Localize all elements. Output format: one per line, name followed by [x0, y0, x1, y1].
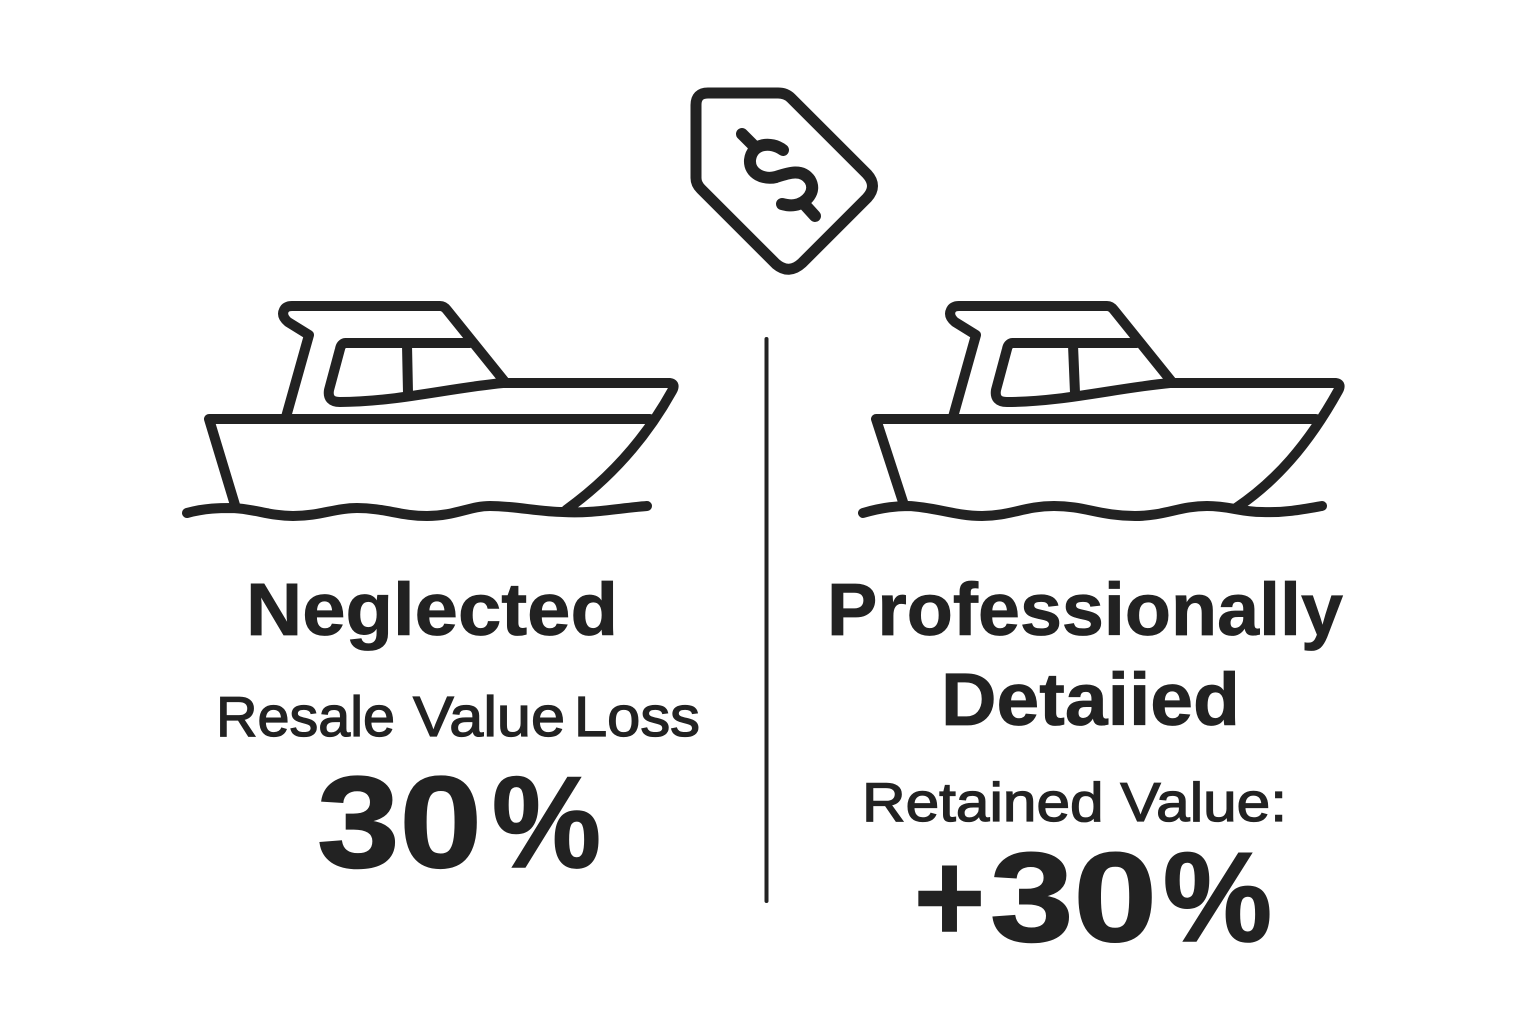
heading: Professionally Detailed	[827, 568, 1343, 741]
water line	[863, 506, 1322, 516]
divider	[764, 339, 768, 901]
statistic: +30%: 30	[990, 826, 1157, 968]
label: Resale Value Loss: Value	[413, 685, 565, 749]
icon: professionally detailed boat	[863, 306, 1340, 516]
label: Resale Value Loss: Resale	[216, 685, 395, 749]
statistic: 30%: 30	[317, 749, 482, 895]
statistic: +30%: %	[1163, 826, 1272, 968]
label: Resale Value Loss: Loss	[574, 685, 700, 749]
water line	[187, 506, 647, 516]
statistic: 30%: %	[492, 749, 601, 895]
icon: neglected boat	[187, 306, 674, 516]
statistic: +30%: +	[914, 826, 985, 968]
heading: Neglected: Neglected	[246, 568, 618, 651]
label: Retained Value: Retained Value:	[862, 771, 1287, 833]
heading: Professionally Detailed: Detaiied	[941, 658, 1240, 741]
icon: price tag with dollar sign	[696, 93, 872, 269]
heading: Professionally Detailed: Professionally	[827, 568, 1343, 651]
